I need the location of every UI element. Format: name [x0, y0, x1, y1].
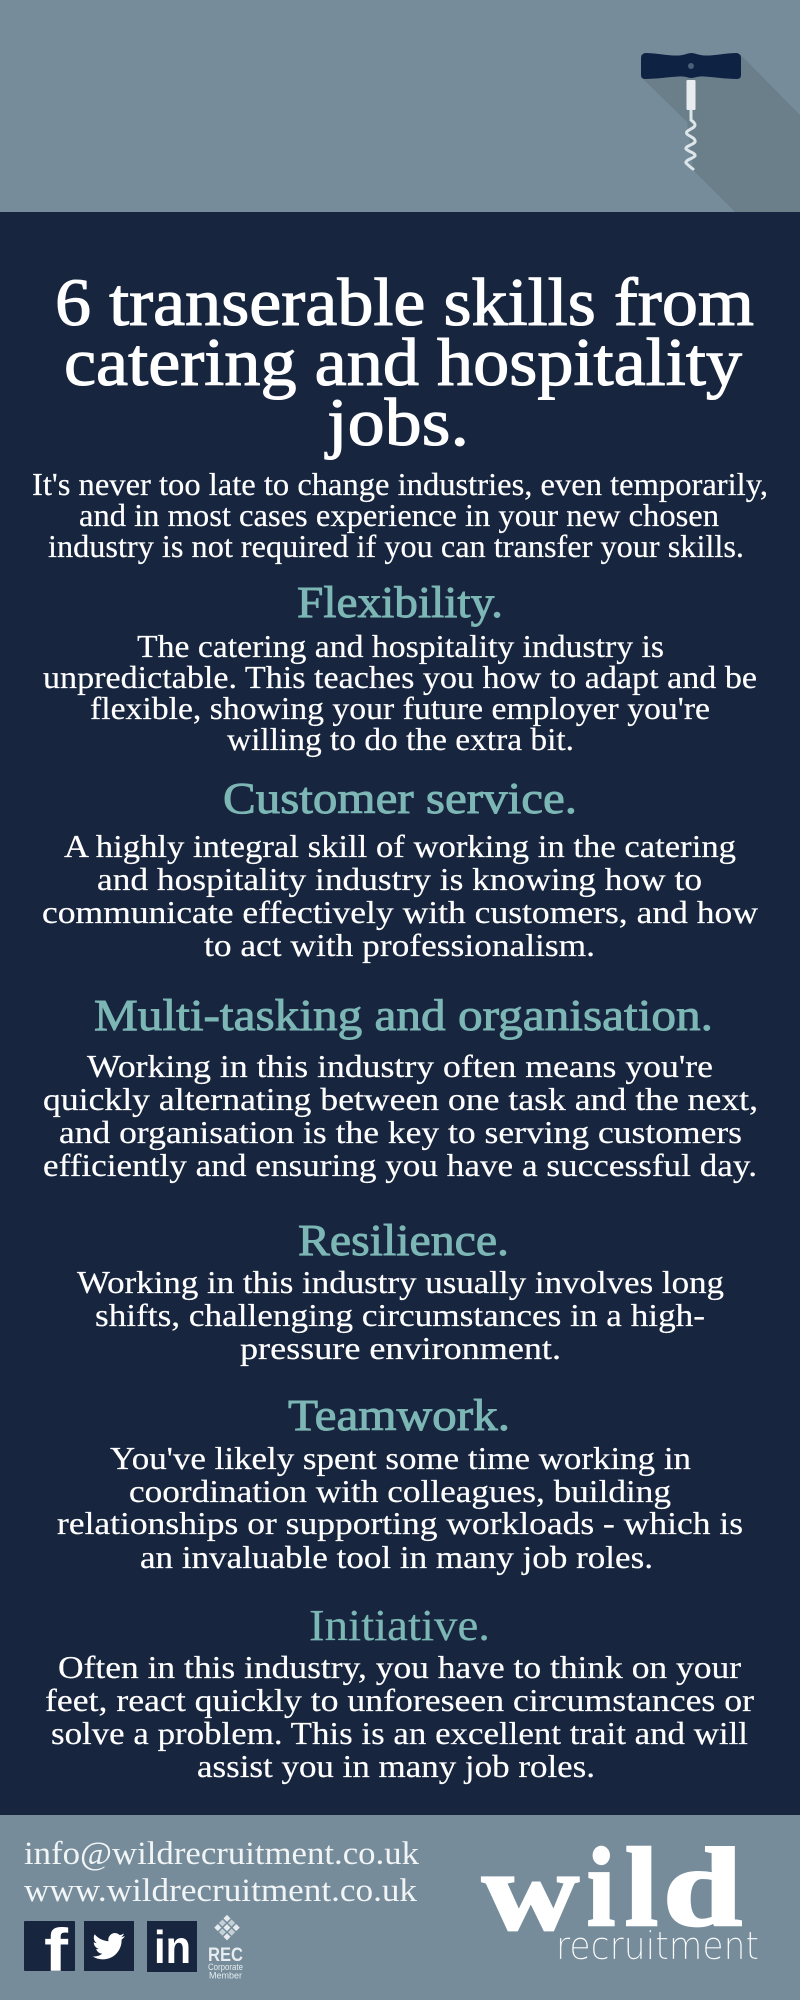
section: resilience: Working in this industry usually involves long: [77, 1264, 724, 1300]
logo wordmark: wild: l: [625, 1826, 658, 1950]
section: resilience: [77, 1216, 724, 1366]
section: multi-tasking: and organisation is the key to serving customers: [59, 1114, 742, 1150]
heading: resilience: Resilience.: [298, 1216, 509, 1265]
section: teamwork: [57, 1391, 743, 1575]
logo: wild recruitment: [482, 1826, 759, 1968]
REC corporate member badge: REC: [208, 1945, 243, 1966]
logo wordmark: wild: w: [482, 1830, 579, 1954]
section: multi-tasking: efficiently and ensuring you have a successful day.: [43, 1147, 757, 1183]
icon: facebook: [24, 1917, 75, 1984]
contact details: info@wildrecruitment.co.uk: [24, 1836, 420, 1872]
section: initiative: solve a problem. This is an excellent trait and will: [51, 1715, 748, 1751]
section: resilience: shifts, challenging circumstances in a high-: [95, 1297, 705, 1333]
intro paragraph: and in most cases experience in your new chosen: [79, 497, 719, 533]
section: flexibility: unpredictable. This teaches you how to adapt and be: [43, 659, 757, 695]
icon: corkscrew: [641, 53, 741, 169]
section: resilience: pressure environment.: [240, 1330, 561, 1366]
section: customer service: communicate effectively with customers, and how: [42, 894, 758, 930]
contact details: [24, 1836, 420, 1909]
section: initiative: feet, react quickly to unforeseen circumstances or: [45, 1682, 754, 1718]
intro paragraph: [32, 466, 768, 564]
title: catering and hospitality: [64, 324, 742, 400]
title: 6 transerable skills from: [55, 264, 754, 340]
title: [55, 264, 754, 460]
logo wordmark: wild: [482, 1826, 742, 1954]
section: customer service: and hospitality industry is knowing how to: [97, 861, 702, 897]
heading: flexibility: Flexibility.: [297, 578, 503, 627]
logo wordmark: wild: d: [663, 1826, 742, 1950]
section: multi-tasking: [43, 991, 758, 1183]
contact details: www.wildrecruitment.co.uk: [24, 1873, 418, 1909]
section: teamwork: coordination with colleagues, building: [129, 1473, 671, 1509]
icon: REC diamond mark: [214, 1915, 240, 1940]
section: multi-tasking: Working in this industry often means you're: [87, 1048, 713, 1084]
heading: initiative: Initiative.: [309, 1601, 490, 1650]
intro paragraph: industry is not required if you can transfer your skills.: [48, 528, 744, 564]
heading: customer service: Customer service.: [223, 774, 577, 823]
icon: linkedin: in: [154, 1921, 191, 1973]
intro paragraph: It's never too late to change industries, even temporarily,: [32, 466, 768, 502]
section: teamwork: an invaluable tool in many job roles.: [140, 1539, 653, 1575]
section: customer service: [42, 774, 758, 963]
section: flexibility: The catering and hospitality industry is: [137, 628, 664, 664]
section: teamwork: You've likely spent some time working in: [110, 1440, 691, 1476]
section: initiative: Often in this industry, you have to think on your: [58, 1649, 741, 1685]
section: teamwork: relationships or supporting workloads - which is: [57, 1505, 743, 1541]
section: flexibility: flexible, showing your future employer you're: [90, 690, 710, 726]
panel: footer: [0, 1815, 800, 2000]
REC corporate member badge: Member: [209, 1970, 242, 1980]
title: jobs.: [325, 384, 469, 460]
section: multi-tasking: quickly alternating between one task and the next,: [43, 1081, 758, 1117]
corkscrew long shadow: [642, 55, 800, 212]
logo wordmark: wild: i: [587, 1826, 615, 1950]
section: initiative: [45, 1601, 754, 1784]
section: customer service: to act with professionalism.: [204, 927, 595, 963]
REC corporate member badge: Corporate: [208, 1962, 243, 1972]
heading: teamwork: Teamwork.: [288, 1391, 510, 1440]
heading: multi-tasking: Multi-tasking and organisation.: [94, 991, 713, 1040]
section: initiative: assist you in many job roles.: [197, 1748, 595, 1784]
section: flexibility: willing to do the extra bit.: [227, 721, 574, 757]
panel: top banner: [0, 0, 800, 212]
section: flexibility: [43, 578, 757, 757]
icon: twitter: [84, 1921, 134, 1971]
icon: facebook: f: [44, 1917, 69, 1984]
logo wordmark: recruitment: recruitment: [556, 1924, 759, 1968]
section: customer service: A highly integral skill of working in the catering: [64, 828, 736, 864]
REC corporate member badge: [208, 1915, 243, 1980]
